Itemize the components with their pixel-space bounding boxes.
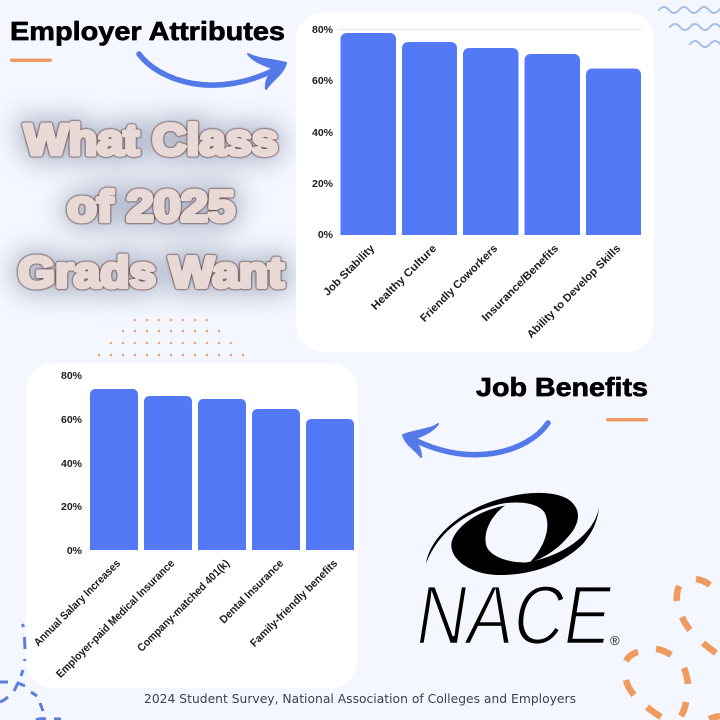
footer source: 2024 Student Survey, National Association of Colleges and Employers: [144, 691, 576, 706]
accent line: benefits: [606, 418, 648, 422]
title: What Class: [24, 116, 278, 164]
title: of 2025: [67, 182, 235, 231]
panel: job benefits chart: [26, 363, 358, 688]
registered mark: ®: [610, 633, 620, 648]
y axis labels: 0%: [67, 545, 83, 557]
y axis labels: 40%: [312, 127, 334, 139]
title: of 2025: [67, 182, 235, 231]
category labels: Annual Salary Increases: [32, 558, 123, 649]
y axis labels: 20%: [61, 501, 83, 513]
y axis labels: [312, 24, 334, 241]
y axis labels: 60%: [61, 414, 83, 426]
decoration: dot pyramid: [98, 319, 244, 356]
category labels: Friendly Coworkers: [418, 243, 500, 325]
arrow: to benefits chart: [403, 423, 548, 457]
category labels: Dental Insurance: [218, 558, 286, 626]
decoration: wavy lines: [659, 7, 720, 47]
title: What Class: [24, 116, 278, 164]
category labels: Job Stability: [321, 242, 378, 298]
heading: Job Benefits: Job Benefits: [476, 372, 648, 402]
y axis labels: 60%: [312, 75, 334, 87]
decoration: blue dashed circles: [0, 624, 61, 720]
category labels: Employer-paid Medical Insurance: [54, 558, 177, 681]
title: Grads Want: [18, 248, 284, 297]
logo: NACE: [410, 493, 620, 662]
bars: [90, 389, 354, 550]
y axis labels: 80%: [312, 24, 334, 36]
arrow: to employer chart: [139, 54, 286, 89]
decoration: orange dashed circles: [626, 579, 720, 719]
category labels: Ability to Develop Skills: [525, 243, 623, 341]
title: Grads Want: [18, 248, 284, 297]
title: of 2025: [67, 182, 235, 231]
y axis labels: [61, 370, 83, 557]
logo emblem: [426, 493, 599, 575]
category labels: Insurance/Benefits: [480, 243, 561, 324]
y axis labels: 20%: [312, 178, 334, 190]
heading: Employer Attributes: Employer Attributes: [10, 16, 285, 46]
y axis labels: 80%: [61, 370, 83, 382]
title: What Class: [24, 116, 278, 164]
category labels: Healthy Culture: [369, 243, 439, 313]
title: Grads Want: [18, 248, 284, 297]
logo wordmark: NACE: [410, 567, 619, 662]
panel: employer attributes chart: [296, 12, 654, 352]
category labels: [32, 557, 340, 681]
y axis labels: 40%: [61, 458, 83, 470]
category labels: Company-matched 401(k): [135, 557, 232, 655]
title: [18, 116, 284, 297]
y axis labels: 0%: [318, 229, 334, 241]
bars: [340, 33, 641, 235]
accent line: employer: [10, 58, 52, 62]
category labels: [321, 242, 623, 341]
category labels: Family-friendly benefits: [248, 558, 340, 650]
